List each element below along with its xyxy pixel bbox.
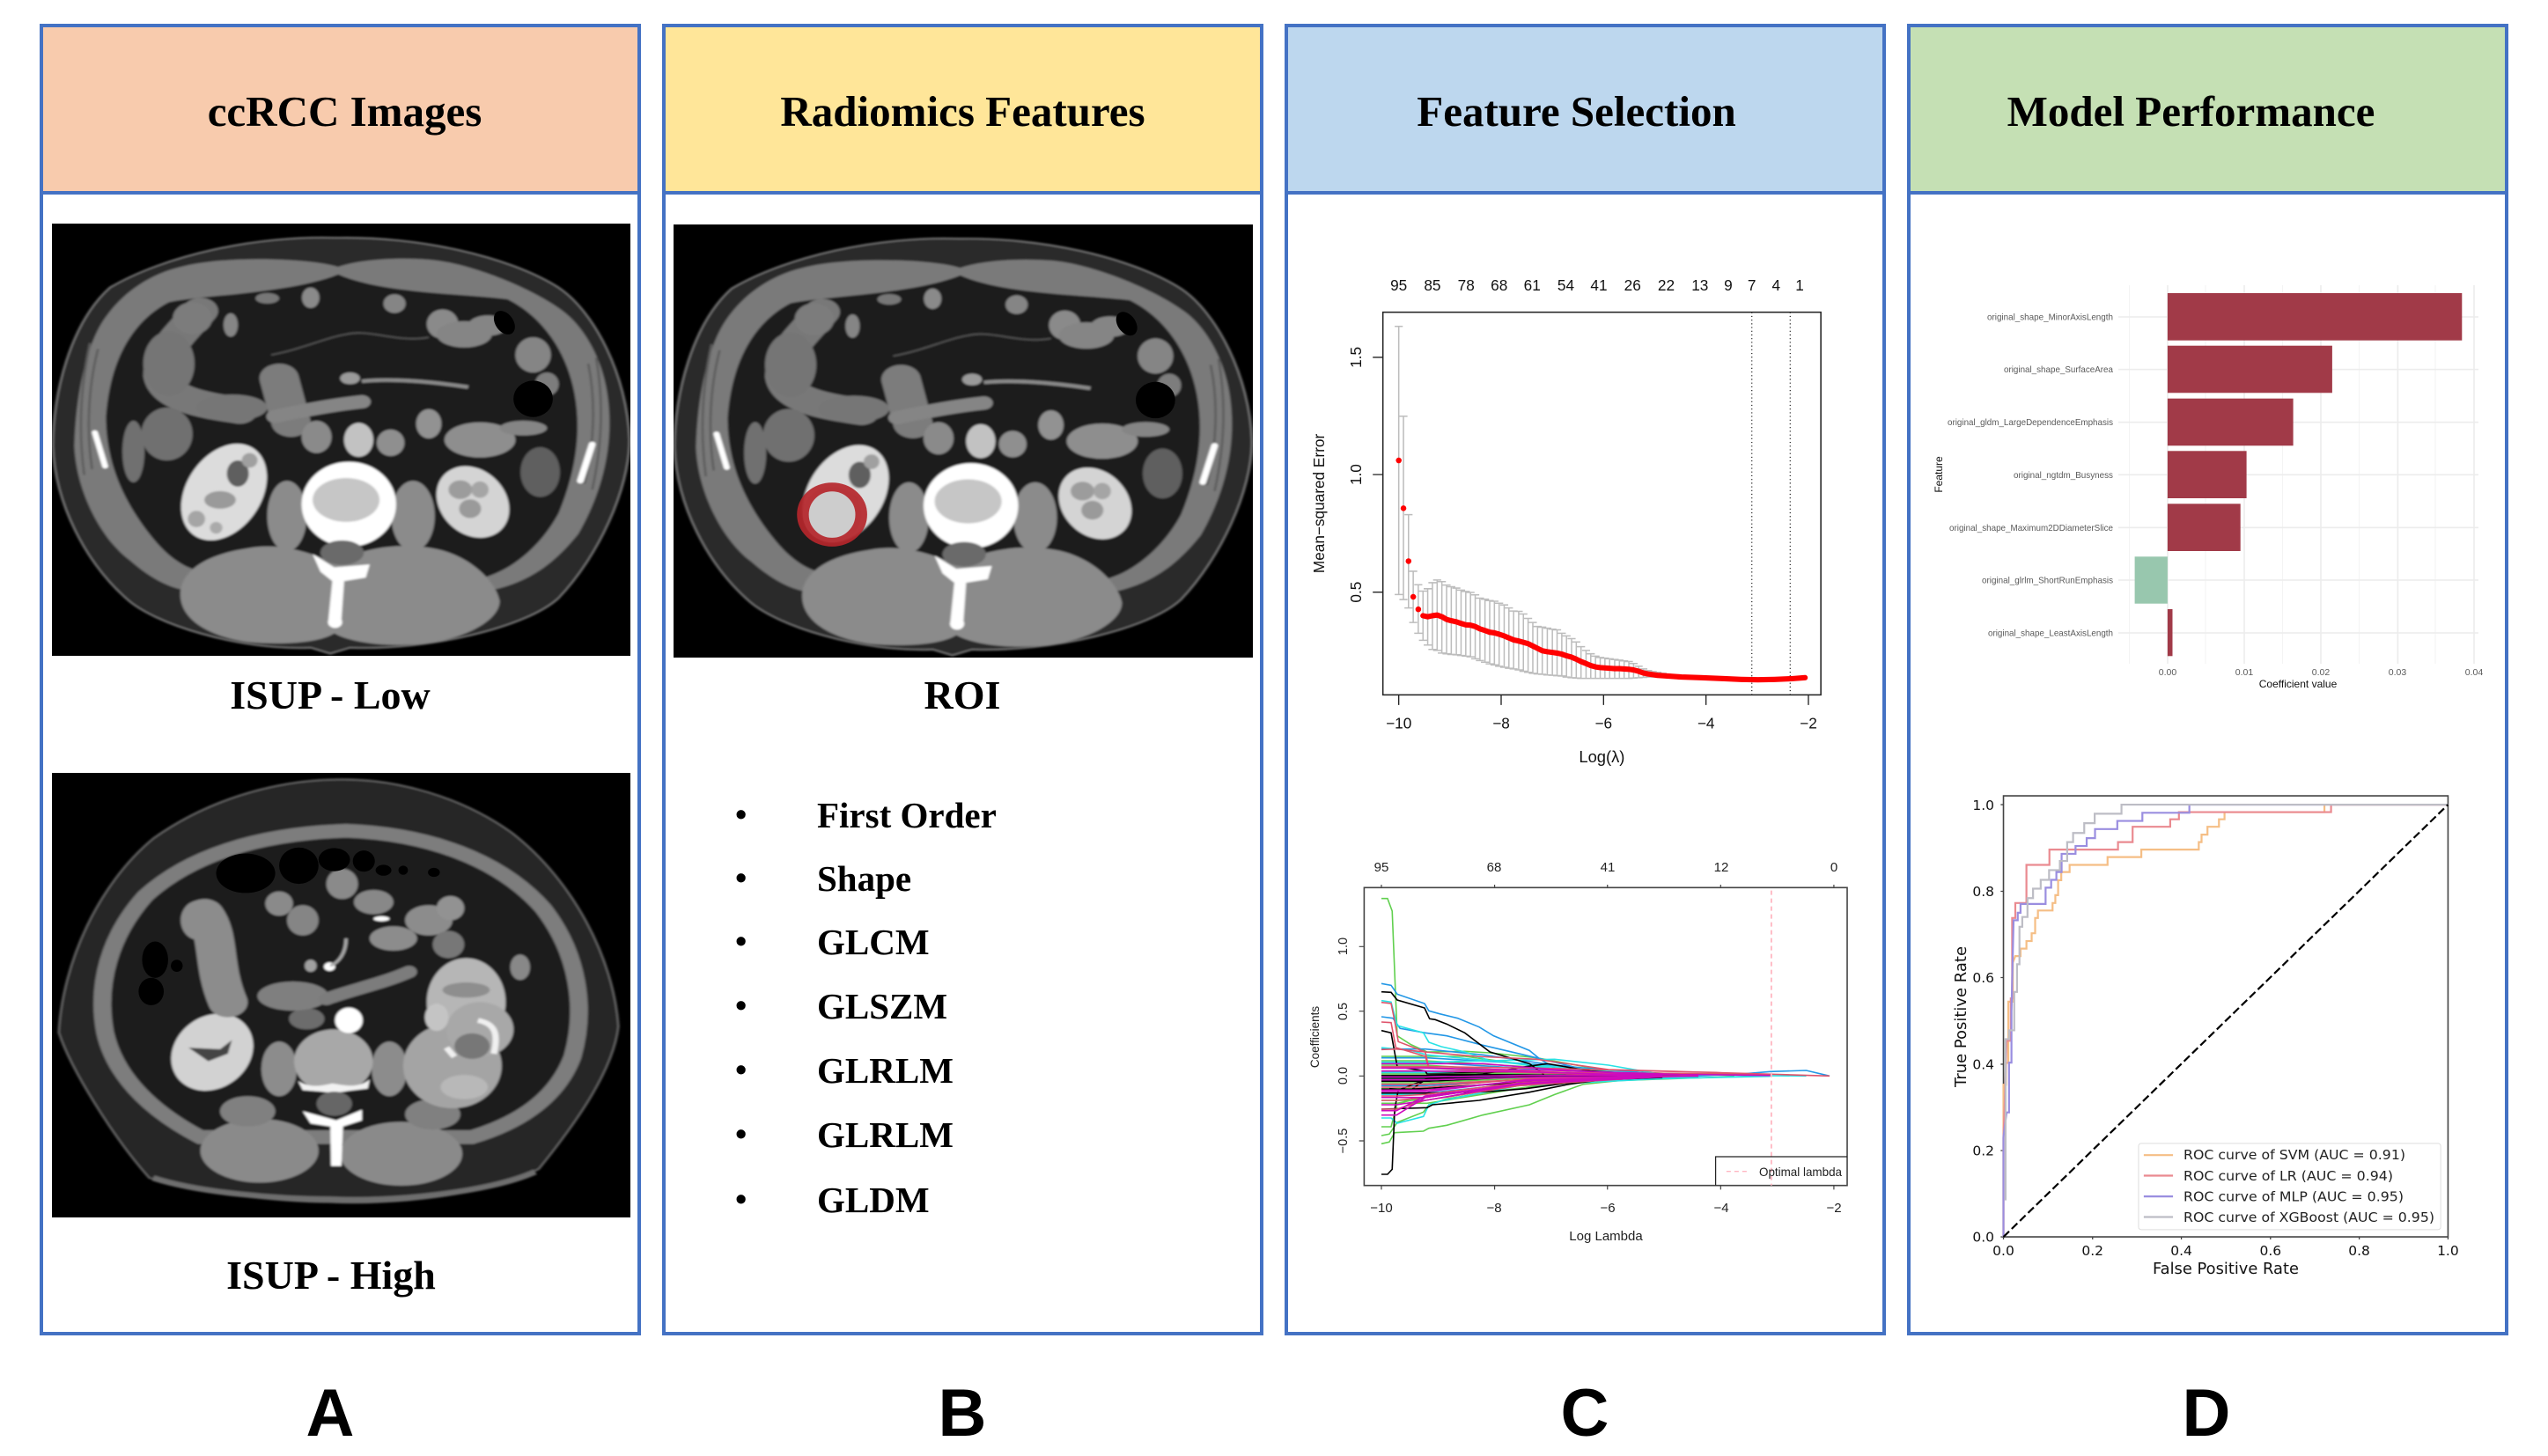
top axis counts: 12: [1714, 860, 1728, 875]
list item: GLCM: [735, 922, 930, 962]
x axis labels: [1992, 1243, 2459, 1259]
feature class list: [735, 795, 997, 1220]
heading: Feature Selection: Feature Selection: [1417, 87, 1736, 136]
y axis labels: 1.0: [1347, 464, 1365, 485]
chart: LASSO coefficient paths: [1308, 860, 1848, 1244]
x axis ticks and title: 0.00: [2159, 667, 2176, 678]
top axis counts: 4: [1771, 276, 1780, 294]
y axis labels: 0.6: [1972, 970, 1994, 986]
panel D: model performance: [1907, 24, 2508, 1335]
list item: Shape: Shape: [817, 858, 911, 899]
y axis labels: [1972, 798, 1994, 1245]
list item: Shape: [735, 858, 911, 899]
top axis counts: [1390, 276, 1804, 294]
panel letter B: B: [939, 1376, 986, 1451]
feature labels: original_shape_Maximum2DDiameterSlice: [1949, 523, 2113, 533]
y axis labels: 0.5: [1347, 582, 1365, 603]
heading: Feature Selection: [1288, 27, 1882, 195]
x axis labels: 0.4: [2170, 1243, 2192, 1259]
x axis ticks and title: 0.03: [2389, 667, 2406, 678]
y axis labels: 0.2: [1972, 1143, 1994, 1158]
list item: GLCM: •: [735, 923, 747, 960]
feature labels: [1948, 312, 2113, 639]
y axis labels: 0.4: [1972, 1056, 1994, 1072]
chart: ROC curves: [1953, 795, 2459, 1278]
top axis counts: [1374, 860, 1837, 875]
top axis counts: 68: [1487, 860, 1501, 875]
axis titles: [1953, 946, 2299, 1278]
list item: GLDM: [735, 1180, 930, 1220]
legend: optimal lambda: Optimal lambda: [1759, 1165, 1842, 1179]
y axis labels: 1.5: [1347, 347, 1365, 368]
y axis labels: [1308, 938, 1351, 1153]
top axis counts: 7: [1748, 276, 1756, 294]
list item: GLDM: •: [735, 1181, 747, 1218]
y axis labels: Mean−squared Error: [1310, 434, 1328, 573]
top axis counts: 85: [1424, 276, 1441, 294]
heading: Model Performance: [1911, 27, 2505, 195]
feature labels: original_shape_MinorAxisLength: [1987, 312, 2113, 322]
feature labels: original_glrlm_ShortRunEmphasis: [1982, 576, 2113, 586]
list item: GLRLM second: GLRLM: [817, 1114, 954, 1155]
list item: Shape: •: [735, 860, 747, 897]
top axis counts: 9: [1724, 276, 1733, 294]
legend text: ROC curve of LR (AUC = 0.94): [2183, 1168, 2393, 1184]
bars: [2135, 293, 2462, 656]
y axis labels: 0.8: [1972, 884, 1994, 900]
list item: GLDM: GLDM: [817, 1180, 930, 1220]
x axis labels: 1.0: [2437, 1243, 2459, 1259]
chart: cross-validation MSE vs log lambda: [1310, 276, 1822, 766]
y axis labels: 1.0: [1337, 938, 1351, 955]
x axis labels: −4: [1697, 715, 1715, 732]
top axis counts: 68: [1491, 276, 1507, 294]
legend text: ROC curve of MLP (AUC = 0.95): [2183, 1188, 2404, 1204]
list item: GLRLM: •: [735, 1052, 747, 1089]
caption: ISUP high: ISUP - High: [226, 1253, 436, 1298]
y axis labels: −0.5: [1337, 1129, 1351, 1153]
list item: GLRLM: GLRLM: [817, 1050, 954, 1091]
x axis labels: −10: [1370, 1201, 1393, 1216]
caption: ROI: ROI: [924, 673, 1000, 717]
y axis labels: Coefficients: [1308, 1006, 1322, 1068]
list item: GLSZM: GLSZM: [817, 986, 947, 1026]
list item: First Order: •: [735, 797, 747, 834]
y axis labels: 0.0: [1337, 1067, 1351, 1085]
list item: GLSZM: [735, 986, 947, 1026]
x axis labels: −2: [1826, 1201, 1842, 1216]
y axis labels: 0.5: [1337, 1003, 1351, 1020]
y axis labels: [1310, 347, 1365, 603]
x axis labels: Log(λ): [1579, 747, 1624, 766]
x axis labels: [1386, 715, 1817, 766]
top axis counts: 26: [1624, 276, 1641, 294]
x axis labels: 0.8: [2348, 1243, 2370, 1259]
heading: ccRCC Images: ccRCC Images: [208, 87, 482, 136]
axis titles: False Positive Rate: [2153, 1261, 2299, 1278]
x axis labels: 0.6: [2259, 1243, 2281, 1259]
x axis labels: [1370, 1201, 1842, 1244]
list item: GLRLM second: •: [735, 1116, 747, 1153]
x axis labels: −6: [1595, 715, 1612, 732]
CT image: ISUP low: [52, 224, 630, 656]
top axis counts: 0: [1830, 860, 1837, 875]
top axis counts: 95: [1390, 276, 1407, 294]
list item: GLRLM: [735, 1050, 954, 1091]
feature labels: original_shape_SurfaceArea: [2004, 364, 2113, 375]
list item: GLRLM second: [735, 1114, 954, 1155]
heading: Radiomics Features: [666, 27, 1260, 195]
panel C: feature selection: [1285, 24, 1886, 1335]
y axis labels: 0.0: [1972, 1229, 1994, 1245]
caption: ISUP low: ISUP - Low: [230, 673, 431, 717]
list item: GLCM: GLCM: [817, 922, 930, 962]
feature labels: original_gldm_LargeDependenceEmphasis: [1948, 417, 2113, 428]
x axis labels: Log Lambda: [1569, 1229, 1643, 1244]
x axis ticks and title: 0.04: [2465, 667, 2483, 678]
x axis labels: 0.0: [1992, 1243, 2014, 1259]
panel letter D: D: [2183, 1376, 2230, 1451]
x axis ticks and title: 0.02: [2312, 667, 2330, 678]
top axis counts: 41: [1590, 276, 1608, 294]
x axis labels: −8: [1486, 1201, 1502, 1216]
legend text: [2183, 1147, 2434, 1225]
error bars: [1395, 327, 1676, 679]
x axis labels: −4: [1713, 1201, 1729, 1216]
x axis labels: −2: [1800, 715, 1817, 732]
legend text: ROC curve of SVM (AUC = 0.91): [2183, 1147, 2405, 1163]
feature labels: original_shape_LeastAxisLength: [1988, 629, 2113, 639]
ROI ring: [803, 487, 861, 542]
list item: First Order: [735, 795, 997, 835]
legend text: ROC curve of XGBoost (AUC = 0.95): [2183, 1210, 2434, 1225]
top axis counts: 41: [1601, 860, 1615, 875]
x axis labels: 0.2: [2081, 1243, 2103, 1259]
x axis ticks and title: Coefficient value: [2259, 678, 2338, 690]
top axis counts: 54: [1558, 276, 1574, 294]
top axis counts: 1: [1795, 276, 1804, 294]
CT image with ROI ring: [674, 224, 1253, 658]
x axis labels: −6: [1600, 1201, 1616, 1216]
top axis counts: 95: [1374, 860, 1388, 875]
y axis labels: 1.0: [1972, 798, 1994, 813]
panel B: radiomics features: [662, 24, 1263, 1335]
x axis labels: −10: [1386, 715, 1411, 732]
feature labels: original_ngtdm_Busyness: [2014, 470, 2113, 481]
heading: Model Performance: Model Performance: [2007, 87, 2375, 136]
x axis labels: −8: [1492, 715, 1510, 732]
top axis counts: 78: [1458, 276, 1475, 294]
x axis ticks and title: 0.01: [2235, 667, 2253, 678]
panel letter A: A: [306, 1376, 354, 1451]
top axis counts: 13: [1691, 276, 1708, 294]
top axis counts: 61: [1524, 276, 1541, 294]
axis titles: True Positive Rate: [1953, 946, 1970, 1088]
panel A: ccRCC images: [40, 24, 641, 1335]
list item: GLSZM: •: [735, 988, 747, 1025]
heading: Radiomics Features: Radiomics Features: [780, 87, 1145, 136]
mean MSE points: [1399, 460, 1805, 680]
top axis counts: 22: [1658, 276, 1675, 294]
heading: ccRCC Images: [43, 27, 637, 195]
list item: First Order: First Order: [817, 795, 997, 835]
panel letter C: C: [1561, 1376, 1609, 1451]
x axis ticks and title: Feature: [1933, 456, 1945, 493]
chart: feature coefficient bars: [1933, 285, 2483, 690]
CT image: ISUP high: [52, 773, 630, 1217]
x axis ticks and title: [1933, 456, 2483, 690]
